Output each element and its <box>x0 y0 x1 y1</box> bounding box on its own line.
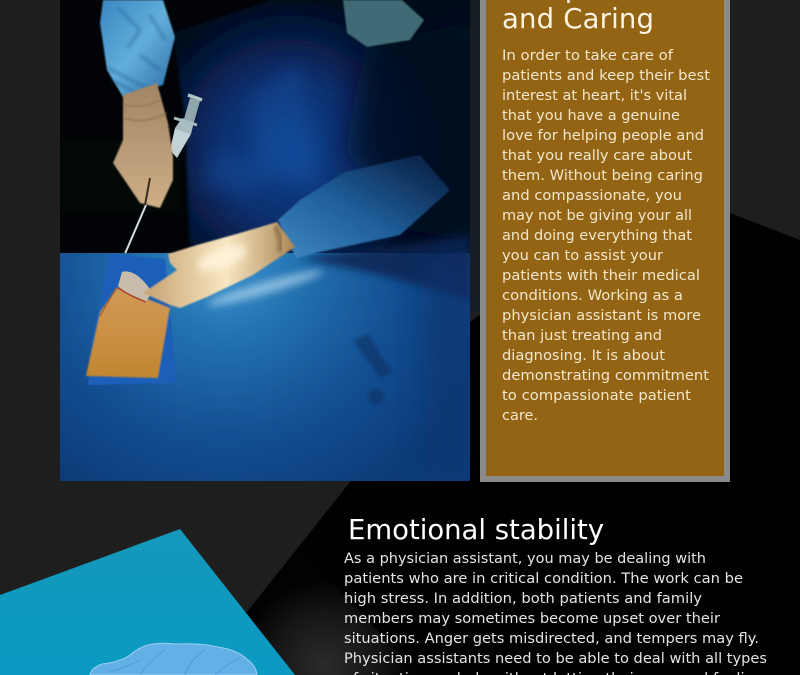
panel body text: patients with their medical <box>502 267 700 284</box>
section body text: situations. Anger gets misdirected, and tempers may fly. <box>344 630 759 647</box>
gloved fist <box>113 83 173 208</box>
forearm sleeve <box>278 155 450 258</box>
section body text: Physician assistants need to be able to deal with all types <box>344 650 767 667</box>
section body text: members may sometimes become upset over their <box>344 610 720 627</box>
panel body text: care. <box>502 407 538 424</box>
panel body text: may not be giving your all <box>502 207 692 224</box>
panel heading: and Caring <box>502 3 654 35</box>
panel body text: patients and keep their best <box>502 67 710 84</box>
skin patch <box>86 287 170 378</box>
section body text: patients who are in critical condition. The work can be <box>344 570 743 587</box>
panel: compassionate and caring <box>480 0 730 482</box>
gown folds <box>202 66 314 194</box>
panel body text: you can to assist your <box>502 247 663 264</box>
arm shadow <box>300 235 470 300</box>
panel heading <box>502 0 714 35</box>
cyan diamond <box>0 529 295 675</box>
icon: surgical cap <box>90 643 257 675</box>
dark gown shadow <box>330 50 426 173</box>
section body text <box>344 550 771 675</box>
panel body text: love for helping people and <box>502 127 704 144</box>
incision <box>100 271 152 316</box>
panel body text: that you have a genuine <box>502 107 680 124</box>
panel body text <box>502 47 710 424</box>
panel body text: them. Without being caring <box>502 167 703 184</box>
needle <box>124 205 146 256</box>
syringe <box>170 95 202 158</box>
right side shadow <box>420 244 470 384</box>
face mask <box>343 0 424 47</box>
panel body text: physician assistant is more <box>502 307 701 324</box>
panel body text: conditions. Working as a <box>502 287 683 304</box>
panel body text: In order to take care of <box>502 47 674 64</box>
panel body text: diagnosing. It is about <box>502 347 665 364</box>
surgeon gown <box>173 0 470 262</box>
panel body text: and compassionate, you <box>502 187 682 204</box>
section body text: As a physician assistant, you may be dealing with <box>344 550 706 567</box>
section body text: high stress. In addition, both patients and family <box>344 590 702 607</box>
panel body text: interest at heart, it's vital <box>502 87 687 104</box>
panel frame <box>480 0 730 482</box>
section: emotional stability <box>344 514 771 675</box>
upper sleeve <box>100 0 175 97</box>
surgical drape <box>60 253 470 481</box>
panel body text: than just treating and <box>502 327 662 344</box>
panel body text: and doing everything that <box>502 227 692 244</box>
drape marks <box>353 334 392 405</box>
glove hand <box>143 222 295 308</box>
panel body text: to compassionate patient <box>502 387 691 404</box>
panel fill <box>486 0 724 476</box>
surgery photo <box>60 0 470 481</box>
drape opening <box>88 254 176 385</box>
panel: cyan diamond with surgical cap <box>0 529 295 675</box>
section heading: Emotional stability <box>348 514 604 546</box>
drape highlight <box>206 266 324 310</box>
panel body text: demonstrating commitment <box>502 367 709 384</box>
panel body text: that you really care about <box>502 147 692 164</box>
